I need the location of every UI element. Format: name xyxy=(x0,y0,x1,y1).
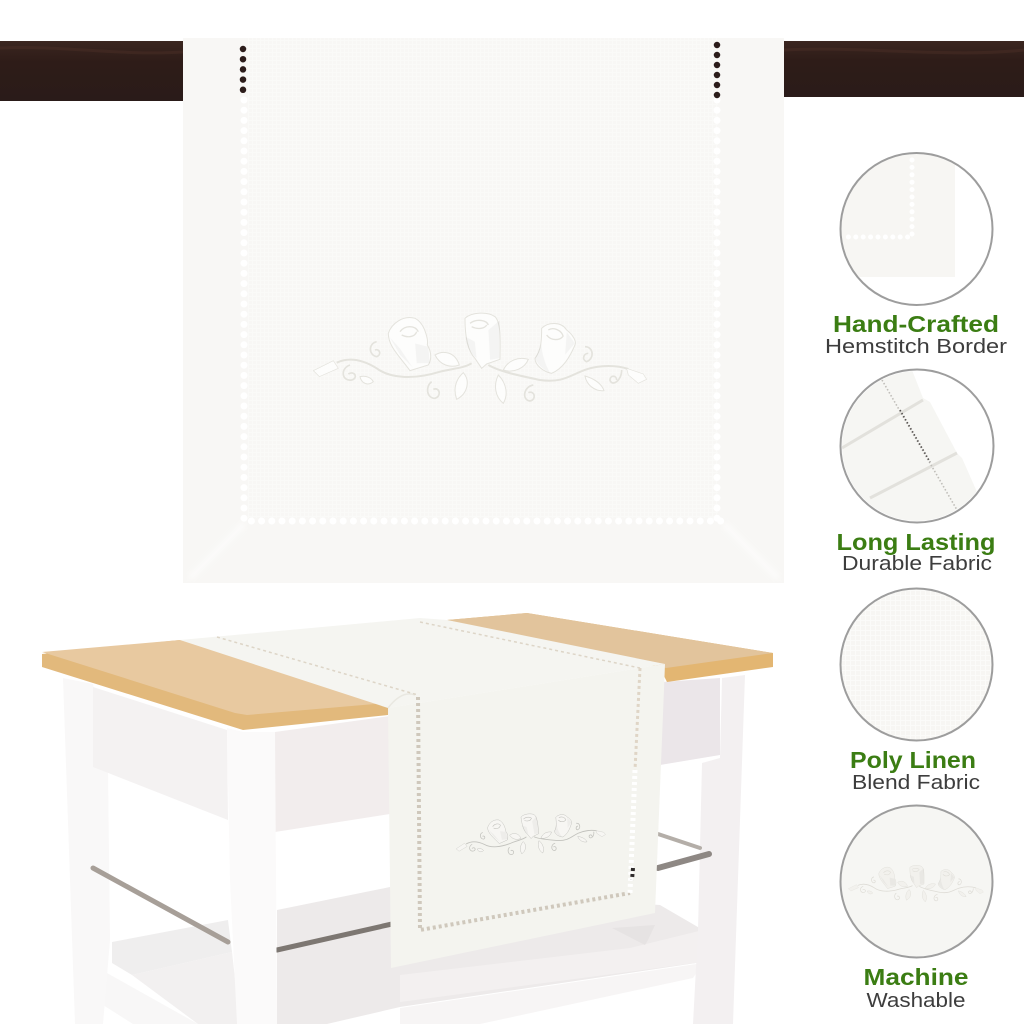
circle photo: folded runners xyxy=(842,372,976,521)
heading: Machine xyxy=(864,964,968,990)
feature: long lasting xyxy=(835,370,996,575)
heading: Hand-Crafted xyxy=(833,311,999,337)
kitchen table with runner xyxy=(42,613,773,1024)
right apron xyxy=(660,678,720,765)
table embroidery xyxy=(453,805,607,863)
subheading: Hemstitch Border xyxy=(825,336,1007,358)
front apron xyxy=(275,716,390,832)
subheading: Durable Fabric xyxy=(842,553,992,575)
feature: poly linen xyxy=(840,588,992,794)
subheading: Washable xyxy=(866,990,966,1012)
back left leg xyxy=(63,678,110,1024)
hemstitch border xyxy=(243,45,724,521)
heading: Poly Linen xyxy=(850,747,976,773)
runner on table xyxy=(180,618,665,968)
hanging table runner close-up xyxy=(183,38,784,583)
heading: Long Lasting xyxy=(836,529,996,555)
subheading: Blend Fabric xyxy=(852,772,980,794)
steel rods xyxy=(93,834,709,950)
circle photo: linen weave xyxy=(840,588,992,740)
runner fabric xyxy=(183,38,784,583)
front left leg xyxy=(227,728,277,1024)
runner top surface xyxy=(180,618,665,708)
feature: hand-crafted xyxy=(825,150,1007,358)
right wood top xyxy=(447,613,773,682)
runner hanging panel xyxy=(388,664,665,968)
mitred corners xyxy=(190,524,778,578)
hem stitching xyxy=(217,622,640,930)
left wood top xyxy=(42,640,390,730)
rose embroidery xyxy=(313,313,647,403)
left apron xyxy=(93,687,228,820)
runner inner panel xyxy=(248,38,718,518)
circle photo: embroidery detail xyxy=(838,803,996,961)
feature: machine washable xyxy=(838,803,996,1012)
back right leg xyxy=(693,675,745,1024)
wooden beam xyxy=(0,41,1024,101)
lower shelf xyxy=(98,887,703,1024)
fold edge xyxy=(388,694,415,708)
circle photo: corner detail xyxy=(840,150,955,277)
